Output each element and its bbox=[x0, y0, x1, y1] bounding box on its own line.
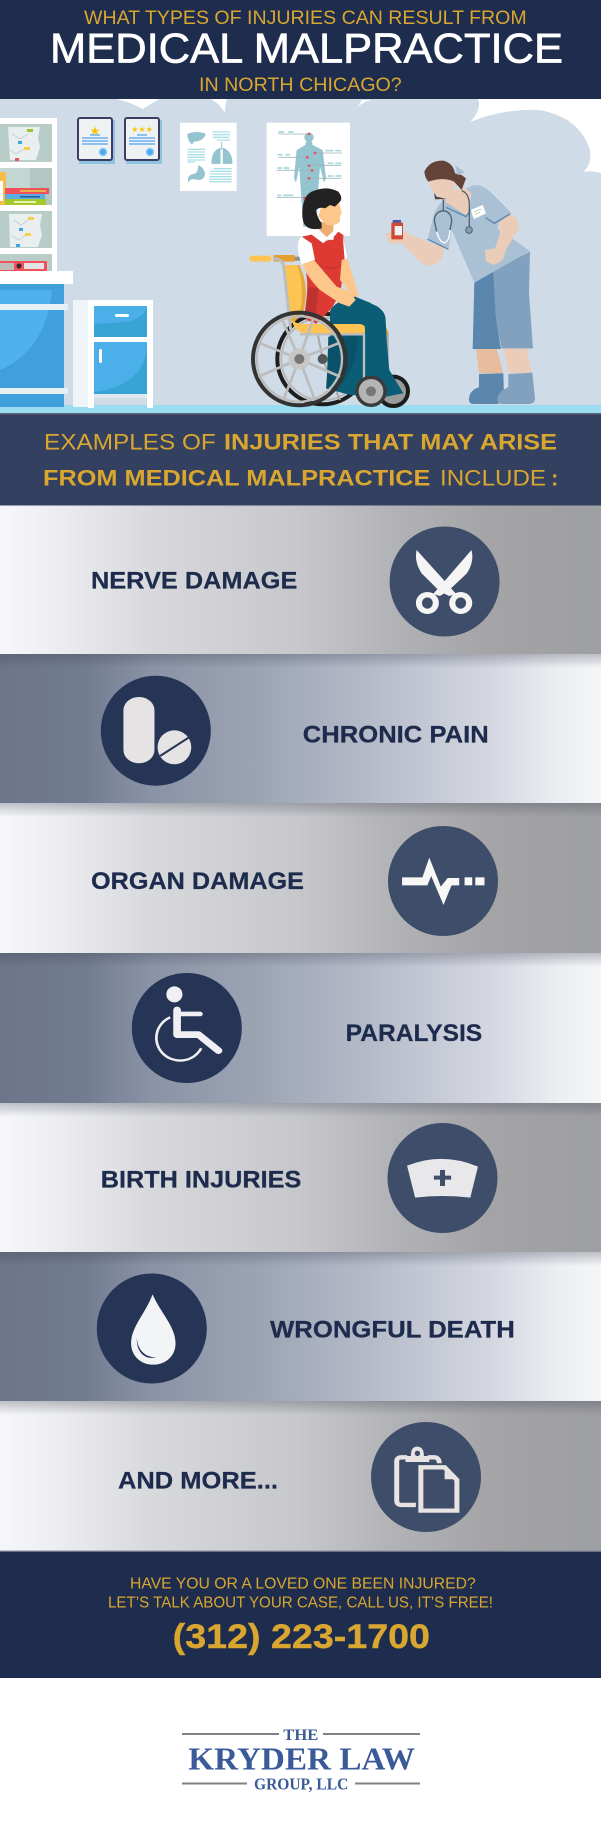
counter cabinet bbox=[0, 271, 73, 407]
torso and dress bbox=[302, 232, 346, 323]
neck bbox=[318, 222, 333, 237]
label: PARALYSIS bbox=[346, 1020, 482, 1047]
wheelchair and patient bbox=[249, 188, 408, 406]
collar bbox=[310, 229, 335, 243]
hair bbox=[302, 188, 341, 229]
icon: drop bbox=[97, 1274, 207, 1384]
subheading line 2 bbox=[43, 465, 558, 490]
chair frame bbox=[386, 333, 389, 370]
icon: scissors bbox=[390, 526, 500, 636]
anatomy posters bbox=[180, 123, 350, 236]
label: CHRONIC PAIN bbox=[303, 721, 489, 748]
subheading banner bbox=[0, 413, 601, 506]
seat bbox=[292, 320, 365, 333]
nightstand bbox=[73, 300, 153, 408]
front wheel bbox=[253, 313, 346, 405]
subheading line 1 bbox=[44, 429, 557, 454]
row: birth injuries bbox=[0, 1103, 601, 1252]
row: paralysis bbox=[0, 953, 601, 1103]
face bbox=[318, 197, 342, 225]
row: organ damage bbox=[0, 803, 601, 953]
arms bbox=[340, 258, 359, 297]
icon: pulse line bbox=[388, 826, 498, 936]
label: BIRTH INJURIES bbox=[101, 1167, 301, 1194]
icon: nurse cap bbox=[388, 1123, 498, 1233]
small back caster bbox=[379, 377, 408, 406]
white cloud shape top right bbox=[470, 99, 601, 173]
rear wheel bbox=[277, 314, 368, 404]
icon: clipboard bbox=[371, 1422, 481, 1532]
logo: The Kryder Law Group bbox=[182, 1727, 420, 1793]
subheading line 2: : bbox=[551, 465, 558, 490]
row: wrongful death bbox=[0, 1252, 601, 1401]
icon: pills bbox=[101, 676, 211, 786]
logo: The Kryder Law Group: KRYDER LAW bbox=[188, 1740, 415, 1776]
label: AND MORE... bbox=[118, 1468, 278, 1495]
row: chronic pain bbox=[0, 654, 601, 803]
row: and more bbox=[0, 1401, 601, 1551]
footer line 1: HAVE YOU OR A LOVED ONE BEEN INJURED? bbox=[130, 1575, 476, 1592]
certificates on wall: ★ bbox=[90, 124, 100, 138]
illustration: medical office scene bbox=[0, 99, 601, 414]
title: MEDICAL MALPRACTICE bbox=[50, 25, 563, 72]
front caster bbox=[357, 377, 385, 405]
subheading line 2: INCLUDE bbox=[440, 465, 546, 490]
footer call to action bbox=[0, 1550, 601, 1678]
label: NERVE DAMAGE bbox=[91, 567, 297, 594]
label: WRONGFUL DEATH bbox=[270, 1317, 515, 1344]
header line 3: IN NORTH CHICAGO? bbox=[199, 74, 402, 96]
icon: wheelchair symbol bbox=[132, 973, 242, 1083]
logo: The Kryder Law Group: GROUP, LLC bbox=[254, 1774, 348, 1793]
subheading line 2: FROM MEDICAL MALPRACTICE bbox=[43, 465, 430, 490]
subheading line 1: EXAMPLES OF bbox=[44, 429, 216, 454]
phone number: (312) 223-1700 bbox=[173, 1618, 430, 1656]
header line 1: WHAT TYPES OF INJURIES CAN RESULT FROM bbox=[84, 7, 527, 29]
sleeves bbox=[298, 237, 315, 265]
logo: The Kryder Law Group: THE bbox=[283, 1727, 318, 1744]
certificates on wall bbox=[78, 118, 162, 164]
floor strip bbox=[0, 405, 601, 414]
nurse holding pill bottle bbox=[385, 161, 535, 404]
bookshelf bbox=[0, 118, 57, 273]
certificates on wall: ★★★ bbox=[131, 125, 153, 134]
legs bbox=[326, 297, 403, 397]
header banner bbox=[0, 0, 601, 99]
white notches along top bbox=[116, 99, 372, 113]
row: nerve damage bbox=[0, 506, 601, 654]
label: ORGAN DAMAGE bbox=[91, 868, 304, 895]
footer line 2: LET’S TALK ABOUT YOUR CASE, CALL US, IT’S FREE! bbox=[108, 1594, 493, 1611]
subheading line 1: INJURIES THAT MAY ARISE bbox=[224, 429, 557, 454]
